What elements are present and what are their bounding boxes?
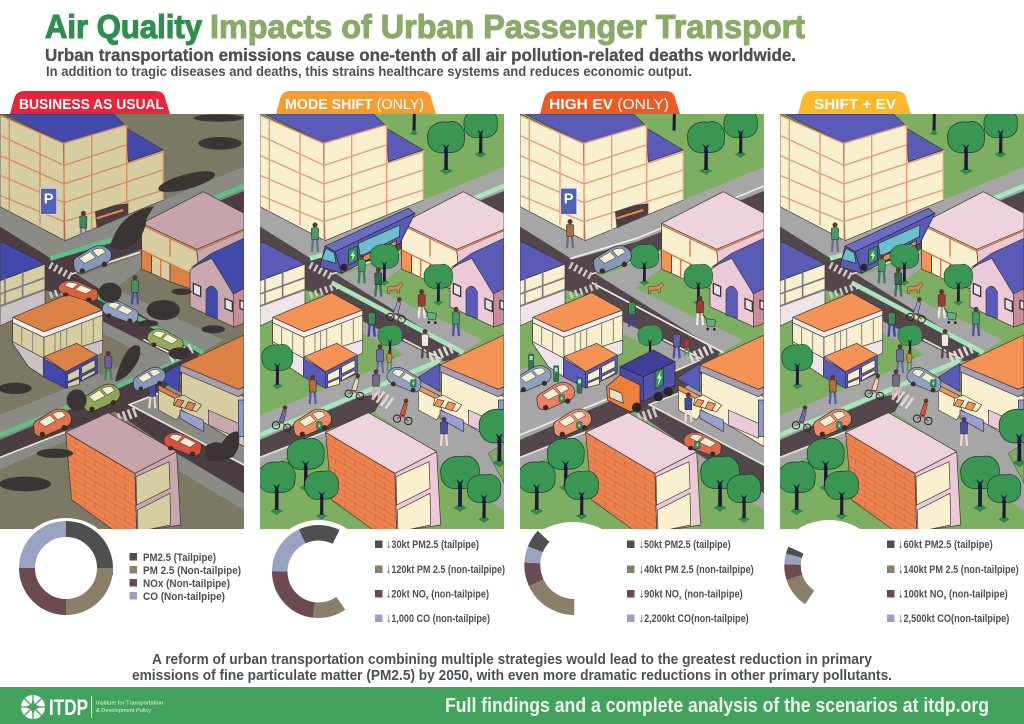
legend: high EV: ↓40kt PM 2.5 (non-tailpipe)	[639, 561, 754, 576]
ITDP logo: Institute for Transportation	[96, 700, 163, 706]
subtitle line 2: In addition to tragic diseases and deaths, this strains healthcare systems and reduces economic output.	[46, 64, 692, 79]
subtitle line 1: Urban transportation emissions cause one-tenth of all air pollution-related deaths worldwide.	[45, 45, 796, 65]
ITDP logo: & Development Policy	[96, 708, 151, 714]
tab: high EV	[540, 91, 680, 114]
legend: business as usual: CO (Non-tailpipe)	[143, 591, 225, 603]
legend: shift plus EV: x	[944, 596, 947, 602]
tab: high EV: HIGH EV (ONLY)	[549, 97, 669, 113]
ITDP logo: ITDP	[49, 695, 88, 720]
donut chart: business as usual	[27, 529, 105, 607]
panel: business as usual city scene	[0, 114, 244, 529]
conclusion text: A reform of urban transportation combining multiple strategies would lead to the greatest reduction in primary	[152, 652, 872, 668]
legend: business as usual: PM2.5 (Tailpipe)	[143, 552, 216, 564]
legend: business as usual: PM 2.5 (Non-tailpipe)	[143, 565, 241, 577]
legend: shift plus EV: ↓60kt PM2.5 (tailpipe)	[898, 536, 993, 551]
legend: business as usual	[130, 552, 241, 603]
panel: high EV city scene	[520, 114, 764, 529]
legend: shift plus EV: ↓100kt NO	[898, 586, 951, 600]
legend: mode shift: ↓1,000 CO (non-tailpipe)	[386, 610, 490, 625]
tab: mode shift	[276, 91, 436, 114]
donut chart: shift plus EV	[793, 528, 868, 603]
tab: shift plus EV: SHIFT + EV	[814, 97, 896, 113]
tab: business as usual	[10, 91, 170, 114]
panel: shift plus EV city scene	[780, 114, 1024, 529]
conclusion text: emissions of fine particulate matter (PM2.5) by 2050, with even more dramatic reductions in other primary pollutants.	[132, 668, 892, 684]
white circle cutouts behind donuts	[13, 518, 887, 648]
legend: shift plus EV	[887, 536, 1019, 625]
legend: shift plus EV: (non-tailpipe)	[946, 588, 1008, 600]
legend: mode shift: (non-tailpipe)	[429, 588, 489, 600]
tab: mode shift: MODE SHIFT (ONLY)	[285, 97, 424, 113]
ITDP logo	[21, 695, 163, 720]
legend: high EV: ↓90kt NO	[639, 586, 686, 600]
legend: high EV: x	[679, 596, 682, 602]
legend: high EV	[627, 536, 754, 625]
footer band	[0, 687, 1024, 724]
legend: high EV: ↓50kt PM2.5 (tailpipe)	[639, 536, 731, 551]
tab: shift plus EV	[798, 91, 911, 114]
legend: mode shift: ↓120kt PM 2.5 (non-tailpipe)	[386, 561, 505, 576]
legend: mode shift	[375, 536, 505, 625]
title: Air Quality	[45, 8, 203, 45]
donut chart: mode shift	[280, 533, 357, 610]
title: Impacts of Urban Passenger Transport	[210, 8, 805, 45]
panel: mode shift city scene	[260, 114, 504, 529]
legend: high EV: (non-tailpipe)	[682, 588, 743, 600]
tab: business as usual: BUSINESS AS USUAL	[19, 97, 164, 113]
legend: business as usual: NOx (Non-tailpipe)	[143, 578, 230, 590]
legend: mode shift: ↓30kt PM2.5 (tailpipe)	[386, 536, 479, 551]
legend: high EV: ↓2,200kt CO(non-tailpipe)	[639, 610, 749, 625]
conclusion text	[132, 652, 892, 684]
donut chart: high EV	[532, 523, 616, 607]
legend: mode shift: ↓20kt NO	[386, 586, 433, 600]
legend: mode shift: x	[426, 596, 429, 602]
